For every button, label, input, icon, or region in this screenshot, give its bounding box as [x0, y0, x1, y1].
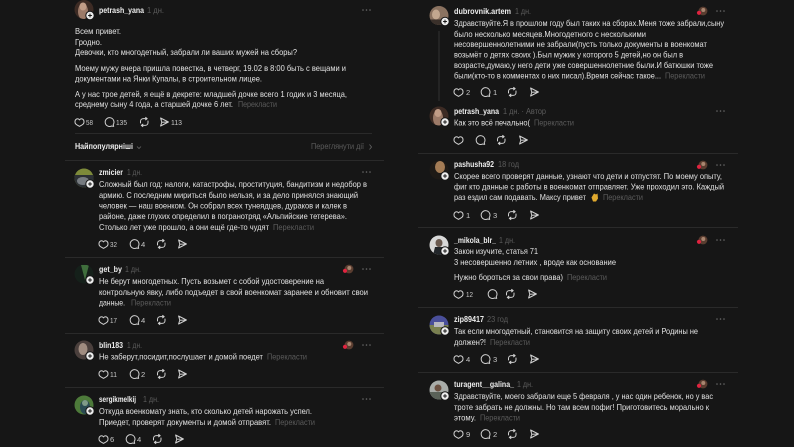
comment: dubrovnik.artem: возьмёт о детях своих ).Был мужик у которого 5 детей,но он был в	[454, 50, 683, 60]
post text: среднему сыну 4 года, а старшей дочке 6 лет.	[75, 100, 233, 109]
avatar: pashusha92	[435, 161, 449, 180]
comment: turagent__galina_	[429, 380, 725, 439]
post author: petrash_yana	[99, 6, 144, 15]
comment: sergikmelkij: sergikmelkij	[99, 395, 136, 404]
comment: dubrovnik.artem: были(кто-то в комментах о них писал).Время сейчас такое...	[454, 72, 661, 80]
post actions: 58	[86, 118, 93, 127]
comment: dubrovnik.artem: Перекласти	[665, 72, 705, 80]
comment: dubrovnik.artem: dubrovnik.artem	[454, 7, 511, 16]
comment: sergikmelkij: 4	[137, 435, 141, 444]
post text: Всем привет.	[75, 27, 121, 36]
comment: _mikola_blr_: Перекласти	[567, 273, 607, 282]
comment: blin183: Перекласти	[267, 352, 307, 362]
avatar: dubrovnik.artem	[429, 6, 449, 26]
comment: _mikola_blr_	[429, 235, 725, 299]
post actions: 113	[171, 118, 182, 127]
avatar: petrash_yana	[74, 0, 94, 20]
comment: _mikola_blr_: 1 дн.	[499, 236, 515, 245]
comment: zmicier: Сложный был год: налоги, катастрофы, проституция, бандитизм и недобор в	[99, 180, 367, 189]
avatar: zmicier	[74, 168, 94, 188]
comment: zip89417	[429, 315, 725, 364]
icon: waving hand	[592, 194, 598, 202]
comment: turagent__galina_: этому.	[454, 414, 476, 422]
post text: Перекласти	[238, 100, 277, 109]
post text	[75, 27, 347, 109]
comment: blin183: Не заберут,посидит,послушает и домой поедет	[99, 352, 263, 362]
comment: dubrovnik.artem	[429, 6, 725, 101]
comment: dubrovnik.artem: 1 дн.	[515, 7, 531, 16]
sort bar: Переглянути дії	[311, 142, 365, 151]
comment: blin183: 2	[141, 370, 145, 379]
comment: get_by: 1 дн.	[125, 265, 141, 274]
comment: zip89417: 3	[493, 355, 497, 364]
comment: pashusha92: Скорее всего проверят данные, узнают что дети и отпустят. По моему опыту,	[454, 172, 722, 181]
comment: _mikola_blr_: _mikola_blr_	[453, 236, 496, 245]
comment: blin183	[74, 340, 371, 379]
comment: get_by: Перекласти	[131, 298, 171, 308]
comment: zmicier: 32	[110, 240, 117, 249]
comment: turagent__galina_: Здравствуйте, моего забрали еще 5 февраля , у нас один ребенок, но у вас	[454, 392, 713, 401]
comment: get_by: 4	[141, 316, 145, 325]
thread line	[438, 31, 440, 101]
comment: petrash_yana reply: Как это всё печально(	[454, 118, 530, 128]
comment: sergikmelkij: Приедет, проверят документы и домой отправят.	[99, 418, 271, 427]
comment: blin183: 1 дн.	[127, 341, 142, 350]
comment: get_by: 17	[110, 316, 117, 325]
comment: pashusha92: раз ездил сам подавать. Максу привет	[454, 193, 586, 202]
sort bar	[75, 142, 372, 151]
post text: Девочки, кто многодетный, забрали ли ваших мужей на сборы?	[75, 48, 297, 57]
avatar: _mikola_blr_	[429, 235, 449, 255]
comment: get_by: get_by	[99, 265, 122, 274]
comment: sergikmelkij: Откуда военкомату знать, кто сколько детей нарожать успел.	[99, 407, 312, 416]
comment: get_by: Не берут многодетных. Пусть возьмет с собой удостоверение на	[99, 277, 324, 286]
comment: petrash_yana reply: petrash_yana	[454, 107, 499, 116]
avatar: petrash_yana	[429, 106, 449, 126]
comment: pashusha92: 3	[493, 211, 497, 220]
post text: Моему мужу вчера пришла повестка, в четверг, 19.02 в 8:00 быть с вещами и	[75, 64, 346, 73]
comment: blin183: 11	[110, 370, 117, 379]
more menu	[362, 9, 371, 11]
comment: zmicier: человек — наш военком. Он собрал всех тунеядцев, дураков и калек в	[99, 202, 347, 210]
comment: dubrovnik.artem: было несколько месяцев.Многодетного с несколькими	[454, 30, 646, 39]
comment: _mikola_blr_: Нужно бороться за свои права)	[454, 273, 563, 282]
comment: zip89417: zip89417	[454, 315, 484, 324]
comment: _mikola_blr_: Закон изучите, статья 71	[454, 247, 538, 256]
comment: turagent__galina_: троте забрать не должны. Но там всем пофиг! Приготовитесь морально к	[454, 403, 709, 412]
comment: turagent__galina_: turagent__galina_	[454, 380, 514, 389]
post actions: 135	[116, 118, 127, 127]
comment: petrash_yana reply: 1 дн. · Автор	[503, 107, 546, 116]
comment: zip89417: Перекласти	[490, 338, 530, 347]
comment: zmicier: Столько лет уже прошло, а они ещё где-то чудят	[99, 223, 269, 232]
avatar: turagent__galina_	[429, 380, 449, 400]
sort bar: Найпопулярніші	[75, 142, 133, 151]
comment: zip89417: 4	[466, 355, 470, 364]
comment: pashusha92: Перекласти	[603, 193, 643, 202]
original post	[74, 0, 371, 127]
comment: zmicier: zmicier	[99, 168, 124, 177]
comment: zip89417: 23 год	[487, 315, 508, 324]
comment: pashusha92: pashusha92	[454, 160, 494, 169]
comment: pashusha92: 18 год	[498, 160, 519, 169]
avatar: sergikmelkij	[74, 395, 94, 415]
comment: zmicier: 1 дн.	[127, 168, 142, 177]
comment: _mikola_blr_: 3 несовершенно летних , вроде как основание	[454, 258, 616, 267]
post actions	[75, 117, 182, 127]
comment: sergikmelkij	[74, 395, 371, 444]
avatar: zip89417	[429, 315, 449, 335]
comment: zip89417: должен?!	[454, 338, 486, 347]
comment: pashusha92	[429, 160, 725, 220]
comment: dubrovnik.artem: Здравствуйте.Я в прошлом году был таких на сборах.Меня тоже забрали,сыну	[454, 19, 725, 28]
comment: zmicier: армию. С последним мириться было нельзя, и за дело принялся знающий	[99, 191, 358, 200]
comment: zmicier: районе, даже глухих определил в погранотряд «Альпийские тетерева».	[99, 212, 347, 221]
post text: А у нас трое детей, я ещё в декрете: младшей дочке всего 1 годик и 3 месяца,	[75, 90, 347, 99]
post text: документами на Янки Купалы, в строительном лицее.	[75, 74, 262, 84]
comment: sergikmelkij: 6	[110, 435, 114, 444]
comment: turagent__galina_: 1 дн.	[517, 380, 533, 389]
comment: turagent__galina_: 9	[466, 430, 470, 439]
comment: _mikola_blr_: 12	[466, 290, 473, 299]
comment: turagent__galina_: 2	[493, 430, 497, 439]
comment: pashusha92: фиг кто данные с работы в военкомат отправляет. Уже проходил это. Каждый	[454, 182, 724, 192]
panel: right comments	[418, 6, 738, 439]
comment: petrash_yana reply: Перекласти	[534, 118, 574, 128]
comment: get_by: данные.	[99, 298, 125, 308]
comment: blin183: blin183	[99, 341, 123, 350]
comment: get_by: контрольную явку, либо подъедет в свой военкомат заранее и обновит свои	[99, 288, 368, 297]
comment: petrash_yana reply	[429, 106, 725, 145]
comment: turagent__galina_: Перекласти	[480, 414, 520, 422]
post text: Гродно.	[75, 38, 102, 47]
comment: get_by	[74, 264, 371, 325]
comment: sergikmelkij: Перекласти	[275, 418, 315, 427]
comment: dubrovnik.artem: возрасте,думаю,у него дети уже совершеннолетние были.И батюшки тоже	[454, 61, 713, 70]
comment: dubrovnik.artem: несовершеннолетними не забрали(пусть только документы в военкомат	[454, 40, 707, 49]
panel: left post and comments	[65, 0, 384, 444]
comment: zip89417: Так если многодетный, становится на защиту своих детей и Родины не	[454, 327, 698, 336]
post author: 1 дн.	[147, 6, 164, 15]
comment: zmicier: Перекласти	[273, 223, 314, 232]
avatar: get_by	[74, 264, 94, 284]
comment: zmicier	[74, 168, 371, 249]
comment: dubrovnik.artem: 2	[466, 88, 470, 97]
comment: zmicier: 4	[141, 240, 145, 249]
comment: sergikmelkij: 1 дн.	[143, 395, 159, 404]
comment: pashusha92: 1	[466, 211, 470, 220]
comment: dubrovnik.artem: 1	[493, 88, 497, 97]
avatar: blin183	[74, 340, 94, 360]
